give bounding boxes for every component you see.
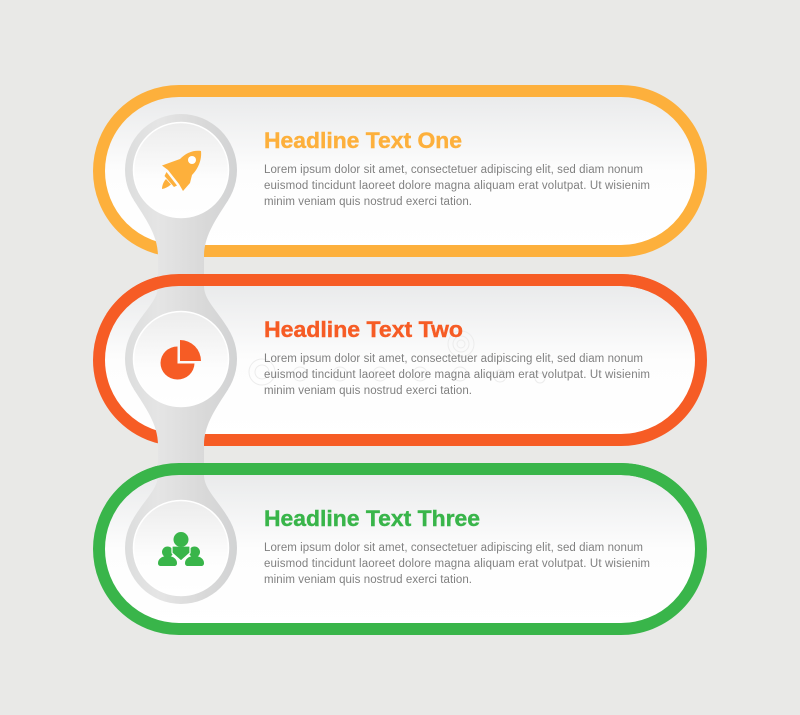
body: three: euismod tincidunt laoreet dolore magna aliquam erat volutpat. Ut wisienim [264, 558, 650, 570]
body: two: minim veniam quis nostrud exerci tation. [264, 385, 472, 397]
node: third circle with people icon [125, 492, 237, 604]
panel: headline one card [99, 91, 701, 251]
heading: three: Headline Text Three [264, 506, 480, 531]
body: two [264, 353, 650, 397]
connector: second to third node [134, 389, 228, 518]
icon: rocket [162, 151, 201, 191]
text block: headline two [264, 317, 650, 397]
text block: headline three [264, 506, 650, 586]
body: one: Lorem ipsum dolor sit amet, consectetuer adipiscing elit, sed diam nonum [264, 164, 643, 176]
heading: two: Headline Text Two [264, 317, 463, 342]
body: three: Lorem ipsum dolor sit amet, consectetuer adipiscing elit, sed diam nonum [264, 542, 643, 554]
body: three [264, 542, 650, 586]
panel: headline two card [99, 280, 701, 440]
watermark [249, 331, 545, 385]
green ring top edge over connector [106, 463, 694, 503]
orange ring top edge over connector [106, 274, 694, 314]
body: two: Lorem ipsum dolor sit amet, consectetuer adipiscing elit, sed diam nonum [264, 353, 643, 365]
body: one: euismod tincidunt laoreet dolore magna aliquam erat volutpat. Ut wisienim [264, 180, 650, 192]
body: one [264, 164, 650, 208]
panel: headline three card [99, 469, 701, 629]
body: three: minim veniam quis nostrud exerci tation. [264, 574, 472, 586]
heading: one: Headline Text One [264, 128, 462, 153]
icon: people [158, 532, 204, 566]
node: first circle with rocket icon [125, 114, 237, 226]
body: one: minim veniam quis nostrud exerci tation. [264, 196, 472, 208]
text block: headline one [264, 128, 650, 208]
node: second circle with pie icon [125, 303, 237, 415]
icon: pie chart [161, 340, 201, 380]
body: two: euismod tincidunt laoreet dolore magna aliquam erat volutpat. Ut wisienim [264, 369, 650, 381]
connector: first to second node [134, 200, 228, 329]
